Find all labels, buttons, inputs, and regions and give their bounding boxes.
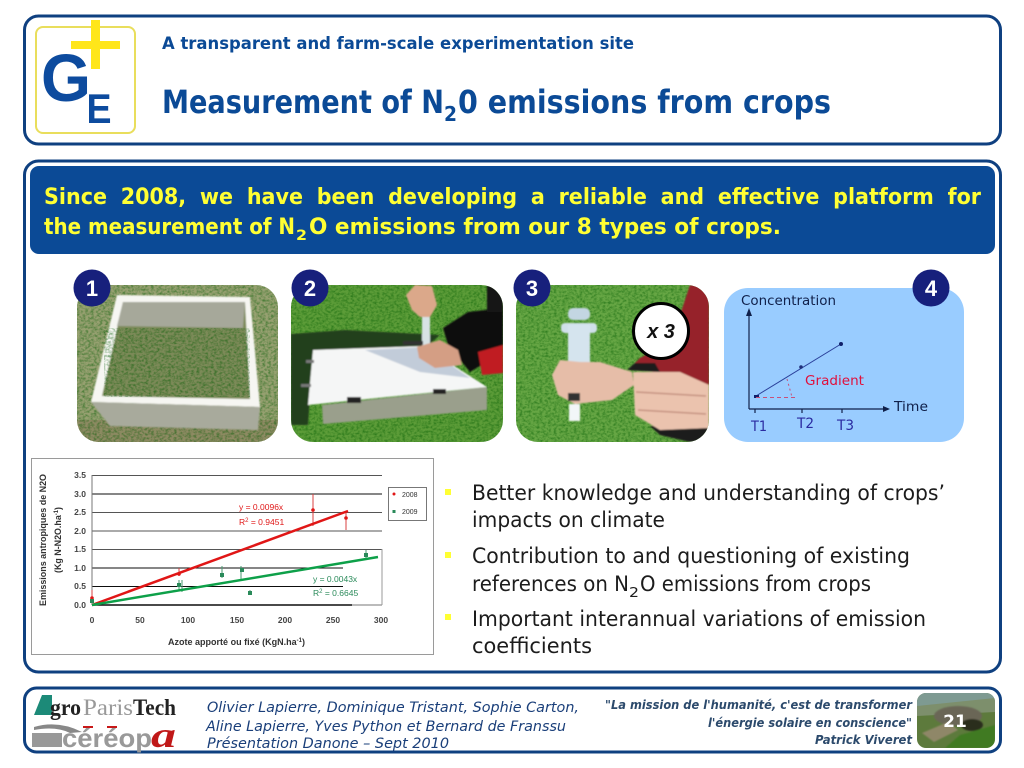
regression labels: = 0.9451 (248, 517, 284, 527)
y axis tick labels: 2.0 (74, 526, 86, 536)
page number: 21 (943, 712, 967, 732)
diagram labels: Concentration (741, 294, 836, 309)
axis titles: Emissions antropiques de N2O (38, 474, 48, 606)
x axis tick labels: 100 (181, 615, 195, 625)
quote: Patrick Viveret (815, 732, 913, 747)
photo 3: syringe sampling (516, 285, 709, 442)
main panel (24, 161, 1000, 672)
callout: times three (634, 304, 688, 358)
bullet 1: Better knowledge and understanding of crops’ (472, 481, 945, 505)
logo: AgroParisTech (34, 695, 176, 720)
x axis tick labels: 200 (278, 615, 292, 625)
logo: Cereopa: a (151, 715, 176, 755)
regression labels (239, 502, 358, 598)
y axis tick labels: 1.0 (74, 563, 86, 573)
badge 2: 2 (304, 276, 316, 301)
footer panel (24, 688, 1000, 755)
authors: Olivier Lapierre, Dominique Tristant, Sophie Carton, (207, 700, 579, 716)
bullet list (445, 481, 945, 658)
badge 3: 3 (526, 276, 538, 301)
title: Measurement of N (162, 83, 444, 121)
quote: "La mission de l'humanité, c'est de transformer (605, 697, 913, 712)
x axis tick labels: 50 (135, 615, 145, 625)
axis titles: ) (302, 637, 305, 647)
y axis tick labels: 1.5 (74, 544, 86, 554)
diagram labels: T2 (796, 416, 814, 432)
banner text: O emissions from our 8 types of crops. (309, 215, 781, 240)
legend (388, 488, 426, 520)
bullet 3: coefficients (472, 634, 592, 658)
authors: Aline Lapierre, Yves Python et Bernard de Franssu (205, 719, 566, 735)
logo: Cereopa: céréop (62, 723, 152, 753)
logo: AgroParisTech: Paris (83, 695, 133, 720)
axis titles (38, 474, 305, 647)
banner text: Since 2008, we have been developing a reliable and effective platform for (44, 185, 981, 210)
badge 4: 4 (925, 276, 938, 301)
x axis tick labels: 150 (230, 615, 244, 625)
scatter chart: emissions vs nitrogen (32, 458, 434, 654)
icon: GE+ logo: G (41, 41, 91, 116)
diagram labels (741, 294, 928, 435)
banner text: the measurement of N (44, 215, 295, 240)
badge 1: 1 (86, 276, 98, 301)
y axis tick labels: 0.5 (74, 581, 86, 591)
badge 2 (292, 270, 328, 306)
badge 4 (912, 270, 950, 306)
quote: l'énergie solaire en conscience" (708, 715, 912, 730)
title (162, 83, 831, 126)
title: 2 (444, 102, 457, 126)
header panel (24, 16, 1000, 144)
callout: times three: x 3 (646, 321, 675, 343)
title: 0 emissions from crops (458, 83, 831, 121)
axis titles: -1 (54, 509, 60, 515)
bullet 2: 2 (629, 586, 639, 601)
banner text: 2 (296, 228, 307, 244)
axis titles: ) (53, 507, 63, 510)
badge 1 (74, 270, 110, 306)
y axis tick labels (74, 470, 86, 610)
logo: AgroParisTech: Tech (133, 695, 176, 720)
x axis tick labels: 0 (90, 615, 95, 625)
regression lines (92, 511, 348, 605)
photo: aerial view of farm with page number (917, 693, 995, 748)
bullet 1: impacts on climate (472, 508, 665, 532)
x axis tick labels: 250 (326, 615, 340, 625)
icon: GE+ logo (36, 20, 135, 133)
subtitle: A transparent and farm-scale experimentation site (162, 34, 634, 54)
badge 3 (514, 270, 550, 306)
regression labels: = 0.6645 (322, 588, 358, 598)
y axis tick labels: 2.5 (74, 507, 86, 517)
grid lines (92, 475, 382, 605)
y axis tick labels: 3.5 (74, 470, 86, 480)
logo: AgroParisTech: gro (50, 695, 81, 720)
logo: Cereopa (32, 715, 176, 755)
bullet 3: Important interannual variations of emission (472, 607, 926, 631)
quote (605, 697, 913, 747)
bullet 3 (445, 607, 926, 658)
diagram labels: Time (893, 400, 928, 415)
bullet 2: Contribution to and questioning of existing (472, 544, 910, 568)
authors (205, 700, 579, 752)
legend: 2008 (402, 492, 418, 499)
photo 2: closed chamber and sampling (291, 285, 503, 442)
data points 2009 (90, 553, 368, 603)
axes (746, 308, 890, 413)
banner (30, 166, 995, 254)
diagram labels: T3 (836, 418, 854, 434)
bullet 2: O emissions from crops (640, 572, 871, 596)
data points 2008 (90, 508, 348, 600)
photo 1: metal frame in wheat field (77, 285, 278, 442)
regression labels: y = 0.0096x (239, 502, 284, 512)
legend: 2009 (402, 509, 418, 516)
regression labels: R (313, 588, 319, 598)
diagram labels: Gradient (805, 374, 864, 389)
panel 4: concentration gradient diagram (724, 288, 964, 442)
icon: GE+ logo: E (86, 85, 112, 132)
banner text (44, 185, 981, 244)
regression labels: 2 (245, 518, 249, 524)
y axis tick labels: 3.0 (74, 489, 86, 499)
y axis tick labels: 0.0 (74, 600, 86, 610)
bullet 2: references on N (472, 572, 629, 596)
axis titles: Azote apporté ou fixé (KgN.ha (168, 637, 297, 647)
x axis tick labels: 300 (374, 615, 388, 625)
x axis tick labels (90, 615, 388, 625)
authors: Présentation Danone – Sept 2010 (207, 736, 449, 752)
regression labels: 2 (319, 589, 323, 595)
axis titles: (Kg N-N2O.ha (53, 514, 63, 573)
gradient line (754, 342, 843, 398)
bullet 2 (445, 544, 910, 601)
axis titles: -1 (297, 638, 303, 644)
regression labels: y = 0.0043x (313, 574, 358, 584)
diagram labels: T1 (750, 419, 767, 435)
regression labels: R (239, 517, 245, 527)
error bars (92, 494, 366, 600)
bullet 1 (445, 481, 945, 532)
